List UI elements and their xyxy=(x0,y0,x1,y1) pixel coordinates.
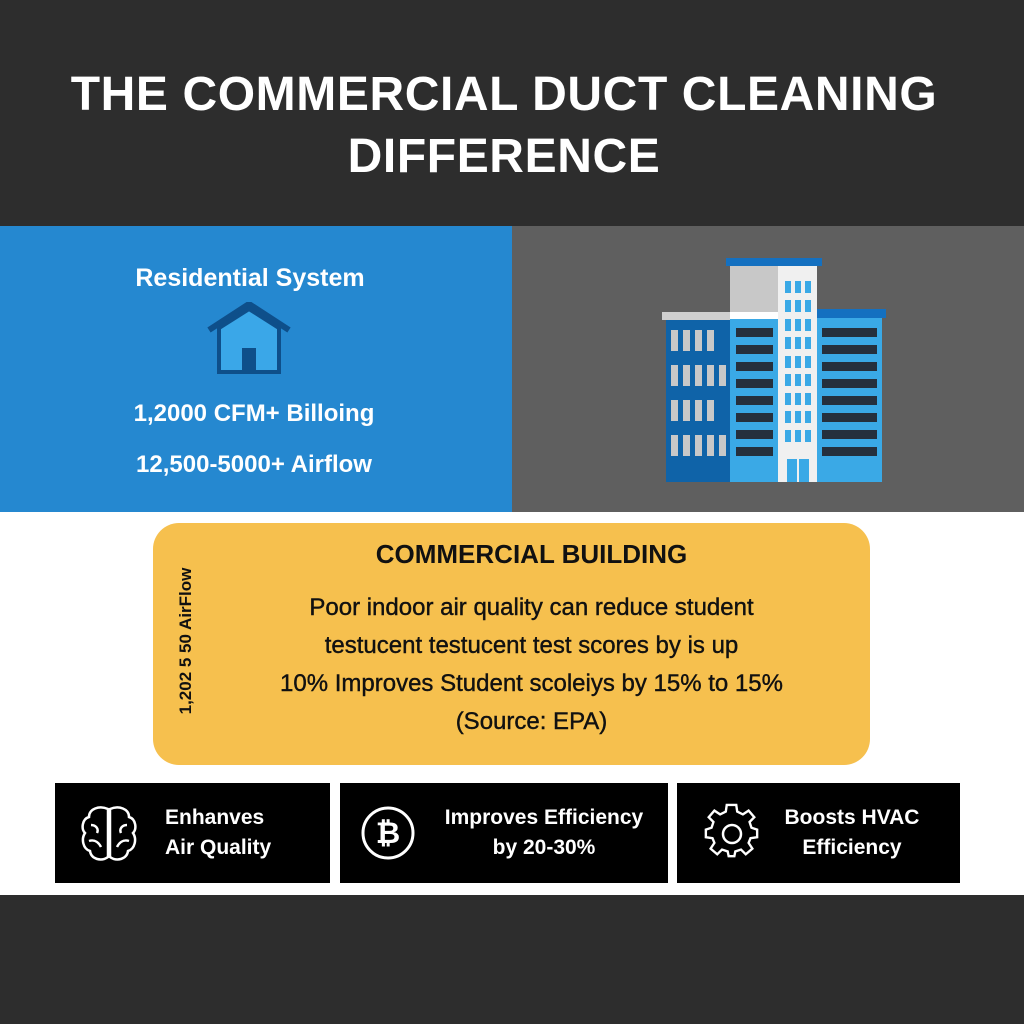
vertical label: 1,202 5 50 AirFlow xyxy=(176,568,195,714)
icon: bitcoin coin xyxy=(362,806,414,860)
text: statistic xyxy=(280,594,783,735)
text: stats: 12,500-5000+ Airflow xyxy=(136,451,372,478)
title: DIFFERENCE xyxy=(348,130,660,183)
heading: residential system: Residential System xyxy=(135,264,365,292)
text: statistic: (Source: EPA) xyxy=(456,708,607,735)
title: THE COMMERCIAL DUCT CLEANING xyxy=(71,68,937,121)
panel: commercial building callout xyxy=(153,523,870,765)
card: HVAC xyxy=(677,783,960,883)
icon: house xyxy=(208,302,290,374)
icon: building xyxy=(662,258,886,482)
text: stats xyxy=(134,400,374,478)
text: Air Quality xyxy=(165,836,271,859)
panel: residential xyxy=(0,226,512,512)
text: Boosts HVAC xyxy=(785,806,919,829)
title xyxy=(71,68,937,183)
panel: commercial image xyxy=(512,226,1024,512)
text xyxy=(445,806,644,859)
text: Improves Efficiency xyxy=(445,806,643,829)
text: Enhanves xyxy=(165,806,264,829)
text: Efficiency xyxy=(802,836,902,859)
icon: gear xyxy=(704,804,758,858)
text: statistic: Poor indoor air quality can reduce student xyxy=(309,594,754,621)
text: statistic: 10% Improves Student scoleiys by 15% to 15% xyxy=(280,670,783,697)
header band xyxy=(0,0,1024,226)
text: stats: 1,2000 CFM+ Billoing xyxy=(134,400,374,427)
footer band xyxy=(0,895,1024,1024)
card: air quality xyxy=(55,783,330,883)
text: statistic: testucent testucent test scores by is up xyxy=(325,632,738,659)
card: efficiency xyxy=(340,783,668,883)
icon: bitcoin coin: ₿ xyxy=(376,817,400,850)
text xyxy=(785,806,919,859)
heading: commercial building: COMMERCIAL BUILDING xyxy=(376,539,687,569)
text xyxy=(165,806,272,859)
text: by 20-30% xyxy=(493,836,595,859)
icon: brain xyxy=(81,806,137,861)
